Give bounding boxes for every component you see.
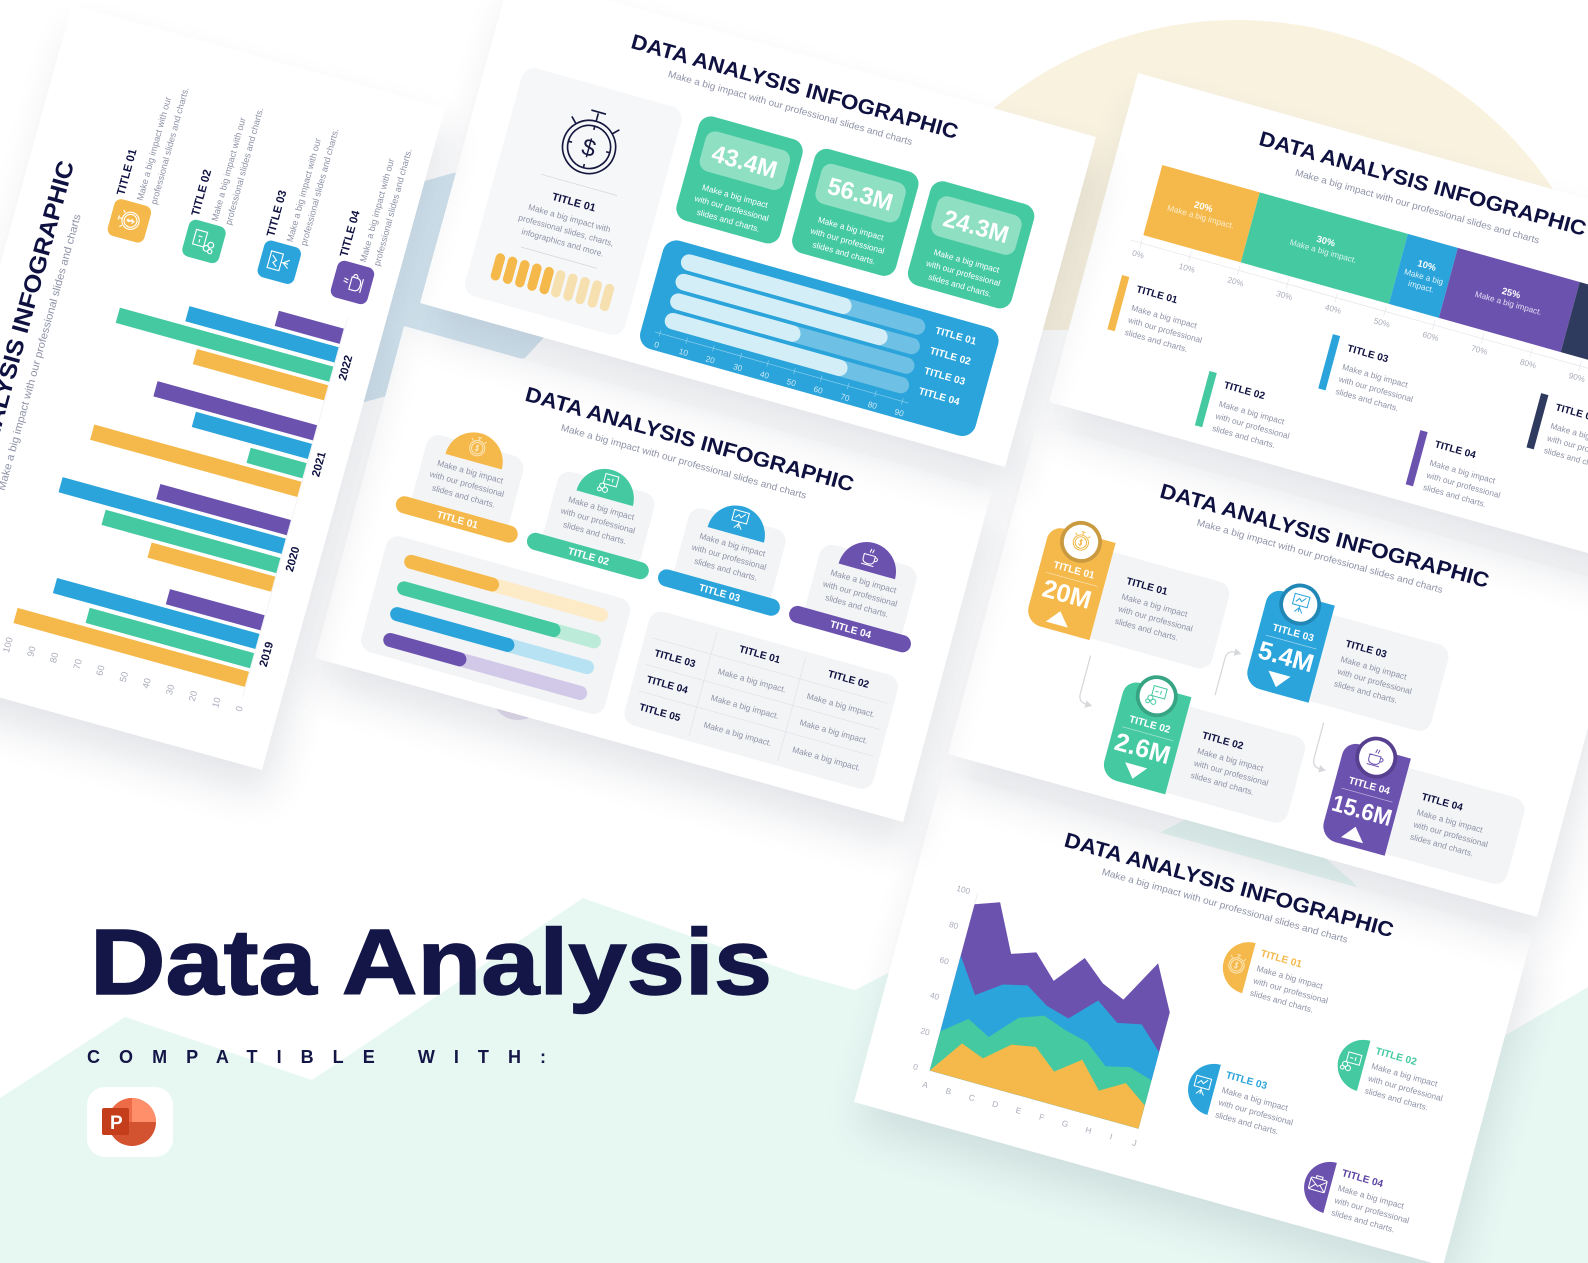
stacked bar segments: 10% [1416, 258, 1438, 274]
legend 03: TITLE 03 [265, 189, 289, 238]
legend 03: professional slides and charts. [299, 127, 341, 247]
KPI card 56.3M: 56.3M [824, 173, 896, 217]
card 03 [1244, 577, 1457, 736]
arch card 02 [525, 453, 672, 581]
arrowhead 02 to 03 [1234, 648, 1242, 658]
slide: arch cards and table [315, 326, 992, 822]
arch card 01: TITLE 01 [435, 510, 479, 532]
legend 03: with our professional [1337, 374, 1414, 404]
background: pale blue shape [350, 160, 560, 406]
arrow: 01 to 02 [1078, 656, 1099, 704]
legend 03: slides and charts. [1335, 386, 1400, 413]
stacked bar segments: Make a big impact. [1474, 290, 1543, 317]
value axis: 20 [187, 690, 199, 702]
KPI card 24.3M: Make a big impact [933, 247, 1001, 275]
legend 01: with our professional [1126, 314, 1203, 345]
legend 04: Make a big impact [1429, 458, 1497, 486]
percent axis: 0% [1131, 249, 1145, 261]
legend 02: Make a big impact with our [210, 116, 248, 222]
legend item 02: TITLE 02 [1374, 1046, 1418, 1068]
stacked bar segments: Make a big [1403, 267, 1445, 287]
arch card 01: with our professional [428, 468, 505, 499]
blue bar chart panel: 30 [732, 362, 744, 373]
blue bar chart panel: TITLE 01 [934, 326, 978, 348]
card 04: 15.6M [1329, 790, 1395, 831]
card 01 [1024, 515, 1237, 673]
icon: PowerPoint [87, 1087, 173, 1157]
arch card 01 [394, 416, 541, 545]
card 04: slides and charts. [1409, 831, 1475, 858]
stacked area chart: 0 [912, 1062, 919, 1072]
blue bar chart panel: TITLE 04 [917, 386, 961, 408]
table panel: Make a big impact. [806, 691, 876, 719]
KPI card 56.3M: with our professional [808, 225, 886, 256]
arch card 01: slides and charts. [431, 483, 496, 510]
blue bar chart panel: 90 [894, 407, 905, 419]
legend item 04: Make a big impact [1337, 1183, 1406, 1211]
table panel: Make a big impact. [791, 744, 862, 773]
slide title: DATA ANALYSIS INFOGRAPHIC [1062, 829, 1396, 942]
legend item 03: with our professional [1217, 1097, 1294, 1127]
legend 01 [104, 77, 191, 245]
KPI card 43.4M: with our professional [693, 193, 770, 223]
slide subtitle: Make a big impact with our professional slides and charts [667, 69, 914, 148]
table panel: TITLE 04 [645, 675, 689, 697]
card 01: TITLE 01 [1125, 576, 1169, 598]
KPI card 43.4M: slides and charts. [696, 207, 761, 234]
value axis: 40 [141, 677, 153, 690]
arch card 03: Make a big impact [698, 531, 767, 559]
legend 01: TITLE 01 [115, 147, 140, 197]
arch card 04: TITLE 04 [829, 619, 873, 641]
stacked area chart: I [1109, 1132, 1113, 1141]
legend 02: slides and charts. [1211, 423, 1276, 450]
legend item 02: Make a big impact [1370, 1061, 1439, 1089]
value axis: 60 [94, 664, 107, 677]
blue bar chart panel: 60 [812, 385, 824, 396]
legend item 01 [1216, 936, 1337, 1018]
legend 04: TITLE 04 [338, 209, 363, 258]
blue bar chart panel [637, 237, 1002, 439]
table panel: TITLE 02 [826, 669, 870, 691]
legend 01 [1107, 275, 1213, 357]
legend 03 [1318, 334, 1424, 416]
stacked bar segments: 30% [1315, 234, 1337, 250]
blue bar chart panel: 70 [839, 392, 851, 403]
blue bar chart panel: TITLE 02 [928, 346, 972, 368]
card 01: 20M [1039, 575, 1094, 615]
card 04: TITLE 04 [1347, 776, 1391, 798]
slide: column chart (rotated) [0, 5, 445, 770]
card 03: with our professional [1335, 666, 1413, 696]
card 02: Make a big impact [1196, 746, 1265, 773]
stacked area chart: 100 [955, 884, 971, 896]
stacked area chart: A [921, 1080, 929, 1090]
background: beige circle [864, 20, 1588, 330]
legend item 03: slides and charts. [1214, 1109, 1280, 1136]
card 02: 2.6M [1112, 728, 1173, 770]
table panel: Make a big impact. [717, 666, 787, 695]
legend 04 [327, 138, 414, 307]
blue bar chart panel: 40 [759, 370, 770, 381]
card 02 [1100, 669, 1313, 827]
legend 05 [1526, 393, 1588, 475]
arrow: 03 to 04 [1312, 723, 1332, 769]
legend 01: Make a big impact with our [135, 96, 173, 202]
percent axis: 30% [1275, 289, 1293, 302]
card 03: Make a big impact [1340, 654, 1408, 682]
slide: area chart [854, 772, 1532, 1263]
value axis: 100 [1, 636, 15, 654]
slide: 100 percent stacked bar [1049, 73, 1588, 566]
legend item 01: Make a big impact [1256, 963, 1324, 991]
KPI card 24.3M [905, 178, 1037, 311]
arch card 03 [656, 489, 803, 618]
icon: stopwatch [556, 105, 624, 180]
legend 02 [1194, 371, 1300, 453]
background: mint mountains [0, 810, 1588, 1263]
legend item 04: TITLE 04 [1341, 1168, 1385, 1190]
value axis: 10 [210, 696, 223, 709]
KPI card 43.4M [673, 113, 806, 246]
value axis [1, 253, 352, 718]
columns 2021: 2021 [310, 450, 329, 478]
legend item 01: slides and charts. [1249, 988, 1315, 1015]
KPI card 43.4M: 43.4M [709, 140, 780, 184]
table panel: Make a big impact. [710, 692, 780, 721]
legend 04: TITLE 04 [1433, 439, 1477, 461]
arch card 03: slides and charts. [693, 556, 759, 583]
KPI card 24.3M: slides and charts. [927, 272, 993, 299]
KPI card 24.3M: with our professional [924, 258, 1002, 288]
blue bar chart panel: 0 [653, 340, 660, 350]
arch card 04: slides and charts. [824, 592, 890, 619]
KPI card 43.4M: Make a big impact [701, 182, 770, 210]
columns 2020 [48, 458, 309, 597]
arrowhead 01 to 02 [1084, 700, 1093, 710]
legend 04: Make a big impact with our [358, 157, 396, 263]
stacked area chart: J [1131, 1138, 1138, 1148]
legend 01: professional slides and charts. [149, 86, 191, 205]
value axis: 30 [164, 683, 176, 696]
slide: KPI cards and blue bars [420, 0, 1096, 467]
percent axis: 50% [1373, 316, 1391, 329]
slide title: DATA ANALYSIS INFOGRAPHIC [523, 383, 856, 497]
legend 04: slides and charts. [1422, 482, 1487, 509]
arch card 04: with our professional [821, 578, 899, 609]
table panel: TITLE 05 [638, 702, 682, 724]
stacked area chart [904, 884, 1189, 1148]
columns 2022 [111, 270, 362, 405]
table panel: Make a big impact. [703, 719, 773, 748]
legend item 02: with our professional [1366, 1073, 1444, 1103]
icon: PowerPoint: P [110, 1113, 123, 1134]
compatible with label: COMPATIBLE WITH: [87, 1047, 546, 1067]
card 03: TITLE 03 [1344, 639, 1388, 661]
percent axis: 70% [1470, 344, 1488, 357]
slide title: DATA ANALYSIS INFOGRAPHIC [1157, 480, 1492, 593]
arch card 02: with our professional [559, 505, 636, 536]
legend item 03 [1182, 1058, 1303, 1140]
card 02: slides and charts. [1190, 770, 1255, 797]
left panel: professional slides, charts, [517, 212, 615, 248]
stacked bar segments: impact. [1407, 279, 1435, 295]
legend 04: professional slides and charts. [372, 148, 414, 267]
pill meter [490, 252, 615, 312]
percent axis: 90% [1568, 371, 1586, 384]
legend 02: TITLE 02 [190, 168, 214, 217]
KPI card 56.3M: Make a big impact [817, 214, 885, 243]
legend item 02 [1331, 1034, 1452, 1116]
arch card 02: slides and charts. [562, 519, 627, 546]
arch card 01: Make a big impact [436, 458, 505, 486]
left panel: infographics and more. [521, 226, 605, 259]
card 01: Make a big impact [1120, 591, 1189, 619]
blue bar chart panel: 50 [786, 377, 797, 388]
KPI card 56.3M: slides and charts. [812, 239, 877, 266]
stacked area chart: 60 [939, 955, 950, 967]
stacked area chart: B [945, 1086, 953, 1097]
card 04: with our professional [1411, 819, 1489, 849]
legend 02: Make a big impact [1218, 399, 1286, 427]
columns 2020: 2020 [284, 545, 302, 573]
percent axis: 20% [1226, 275, 1245, 288]
card 02: TITLE 02 [1128, 714, 1172, 736]
table panel: TITLE 01 [738, 644, 782, 666]
columns 2022: 2022 [337, 354, 355, 382]
columns 2021 [90, 368, 335, 502]
legend 02: TITLE 02 [1222, 380, 1266, 402]
slide subtitle: Make a big impact with our professional slides and charts [1101, 867, 1349, 946]
legend 02: professional slides and charts. [223, 107, 265, 226]
percent axis [1127, 235, 1588, 400]
KPI card 56.3M [789, 146, 921, 279]
card 01: with our professional [1116, 603, 1194, 634]
percent axis: 60% [1421, 330, 1440, 343]
card 01: TITLE 01 [1052, 560, 1096, 582]
blue bar chart panel: 10 [678, 347, 689, 358]
arrow: 02 to 03 [1215, 650, 1236, 698]
legend item 04: slides and charts. [1330, 1207, 1396, 1234]
card 03: slides and charts. [1333, 678, 1399, 705]
card 04: TITLE 04 [1420, 792, 1464, 814]
card 04 [1320, 730, 1533, 889]
legend item 03: Make a big impact [1221, 1085, 1290, 1113]
legend 02: with our professional [1214, 410, 1291, 441]
blue bar chart panel: 80 [867, 400, 878, 411]
columns 2019: 2019 [258, 641, 276, 668]
legend item 04: with our professional [1333, 1195, 1410, 1225]
card 04: Make a big impact [1416, 807, 1485, 835]
left panel: Make a big impact with [527, 202, 612, 234]
stacked area chart: E [1015, 1106, 1023, 1116]
value axis: 90 [25, 645, 38, 658]
table panel: Make a big impact. [799, 717, 869, 746]
stacked bar segments: Make a big impact. [1166, 203, 1235, 231]
arch card 02: TITLE 02 [566, 546, 610, 568]
arrowhead 03 to 04 [1318, 765, 1327, 774]
legend 03 [254, 118, 341, 287]
stacked area chart: H [1084, 1125, 1092, 1136]
stacked bar segments: 20% [1193, 199, 1214, 215]
arch card 03: with our professional [690, 542, 768, 572]
value axis: 0 [234, 705, 245, 713]
legend 02 [179, 97, 265, 266]
arch card 04: Make a big impact [830, 567, 898, 595]
arch card 03: TITLE 03 [698, 583, 741, 605]
legend 01: TITLE 01 [1135, 284, 1179, 306]
stacked area chart: 40 [929, 991, 941, 1002]
slide title: DATA ANALYSIS INFOGRAPHIC [629, 30, 961, 144]
legend item 01: TITLE 01 [1259, 948, 1303, 971]
table panel [622, 609, 901, 792]
stacked area chart: C [968, 1093, 976, 1103]
table panel: TITLE 03 [653, 648, 697, 670]
legend 03: Make a big impact with our [285, 137, 323, 243]
legend 01: Make a big impact [1130, 303, 1199, 331]
blue bar chart panel: TITLE 03 [923, 366, 967, 388]
card 02: with our professional [1192, 757, 1270, 788]
stacked area chart: G [1061, 1119, 1069, 1129]
columns 2019 [13, 551, 283, 692]
legend 04 [1405, 430, 1511, 512]
value axis: 80 [48, 651, 60, 664]
stacked area chart: D [991, 1099, 999, 1110]
progress bars panel [358, 533, 633, 717]
percent axis: 80% [1519, 357, 1537, 370]
legend item 03: TITLE 03 [1224, 1070, 1269, 1092]
slide title: DATA ANALYSIS INFOGRAPHIC [1257, 127, 1588, 241]
legend 03: Make a big impact [1341, 362, 1410, 390]
card 03: TITLE 03 [1271, 623, 1315, 645]
left panel: TITLE 01 [551, 191, 597, 215]
slide subtitle: Make a big impact with our professional slides and charts [1196, 518, 1444, 596]
arch card 04 [787, 526, 934, 654]
slide: process cards [948, 424, 1588, 917]
background: pale purple shape [494, 680, 542, 720]
stacked bar segments: Make a big impact. [1289, 238, 1358, 265]
slide subtitle: Make a big impact with our professional slides and charts [560, 423, 808, 502]
stacked bar segments [1143, 165, 1588, 373]
icon: stopwatch: $ [579, 133, 599, 163]
legend 01: slides and charts. [1124, 327, 1189, 354]
stacked area chart: 20 [919, 1026, 931, 1037]
KPI card 24.3M: 24.3M [940, 205, 1012, 249]
blue bar chart panel: 20 [705, 354, 716, 366]
value axis: 70 [72, 658, 84, 670]
stacked area chart: 80 [948, 920, 960, 931]
card 01: slides and charts. [1114, 616, 1179, 643]
legend 04: with our professional [1424, 470, 1502, 500]
legend item 01: with our professional [1251, 975, 1329, 1006]
stacked area chart: F [1038, 1113, 1045, 1123]
percent axis: 10% [1178, 262, 1196, 275]
value axis: 50 [118, 671, 130, 683]
percent axis: 40% [1324, 303, 1342, 316]
legend item 04 [1298, 1156, 1419, 1238]
card 03: 5.4M [1255, 636, 1317, 678]
card 02: TITLE 02 [1201, 730, 1245, 752]
arch card 02: Make a big impact [567, 494, 636, 522]
slide subtitle: Make a big impact with our professional slides and charts [1294, 168, 1541, 247]
stacked bar segments: 25% [1500, 286, 1522, 302]
legend item 02: slides and charts. [1364, 1085, 1429, 1112]
left panel [462, 65, 685, 338]
legend 03: TITLE 03 [1346, 343, 1390, 365]
main heading: Data Analysis [90, 910, 772, 1014]
